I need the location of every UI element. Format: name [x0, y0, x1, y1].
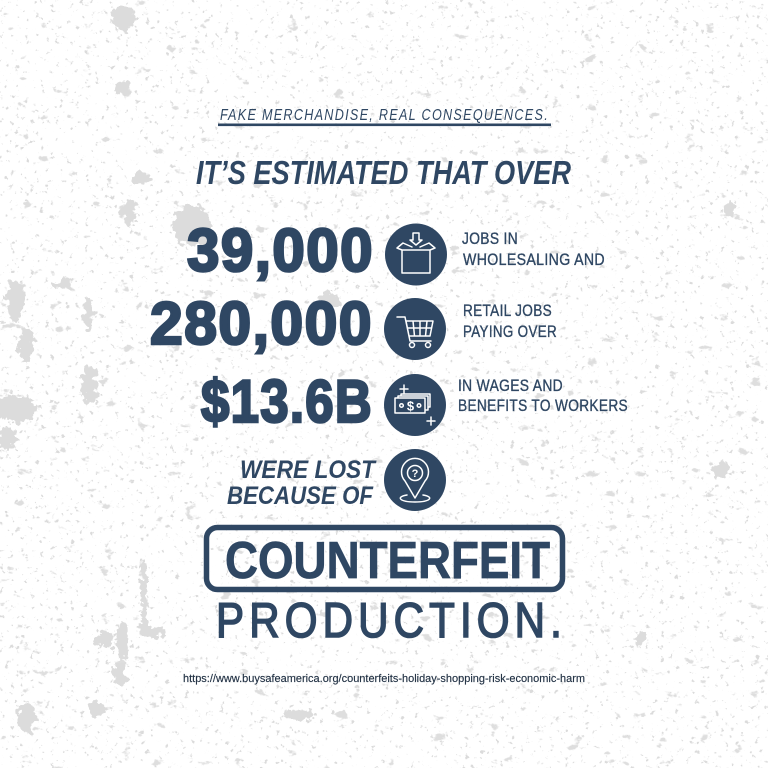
heading: it's estimated that over: IT’S ESTIMATED THAT OVER	[196, 155, 571, 192]
stat number: 280,000	[150, 290, 373, 357]
icon: cash	[384, 374, 446, 436]
stat number: $13.6B	[201, 368, 373, 435]
icon: location pin with question mark: ?	[412, 468, 419, 480]
caption: JOBS IN	[462, 230, 518, 248]
caption: PAYING OVER	[463, 323, 557, 341]
icon: shopping cart	[384, 298, 446, 360]
stamp: counterfeit: COUNTERFEIT	[225, 532, 550, 590]
stat number: 39,000	[187, 217, 374, 284]
caption: BENEFITS TO WORKERS	[458, 397, 628, 415]
row: 39,000 jobs	[187, 217, 605, 286]
icon: open box	[385, 224, 447, 286]
caption: IN WAGES AND	[458, 377, 563, 395]
source url: https://www.buysafeamerica.org/counterfeits-holiday-shopping-risk-economic-harm	[183, 673, 585, 685]
icon: cash: $	[407, 398, 415, 414]
caption	[458, 377, 628, 415]
caption: WHOLESALING AND	[463, 251, 605, 269]
text: because of: BECAUSE OF	[227, 482, 374, 510]
icon: location pin with question mark	[384, 449, 446, 511]
caption: RETAIL JOBS	[463, 302, 552, 320]
heading: production: PRODUCTION.	[216, 594, 567, 648]
row: $13.6B wages	[201, 368, 628, 436]
caption	[463, 302, 557, 341]
text: were lost: WERE LOST	[240, 456, 377, 484]
caption	[462, 230, 605, 269]
row: 280,000 retail jobs	[150, 290, 557, 360]
row: were lost because of	[227, 449, 446, 511]
eyebrow heading: FAKE MERCHANDISE, REAL CONSEQUENCES.	[220, 107, 549, 124]
